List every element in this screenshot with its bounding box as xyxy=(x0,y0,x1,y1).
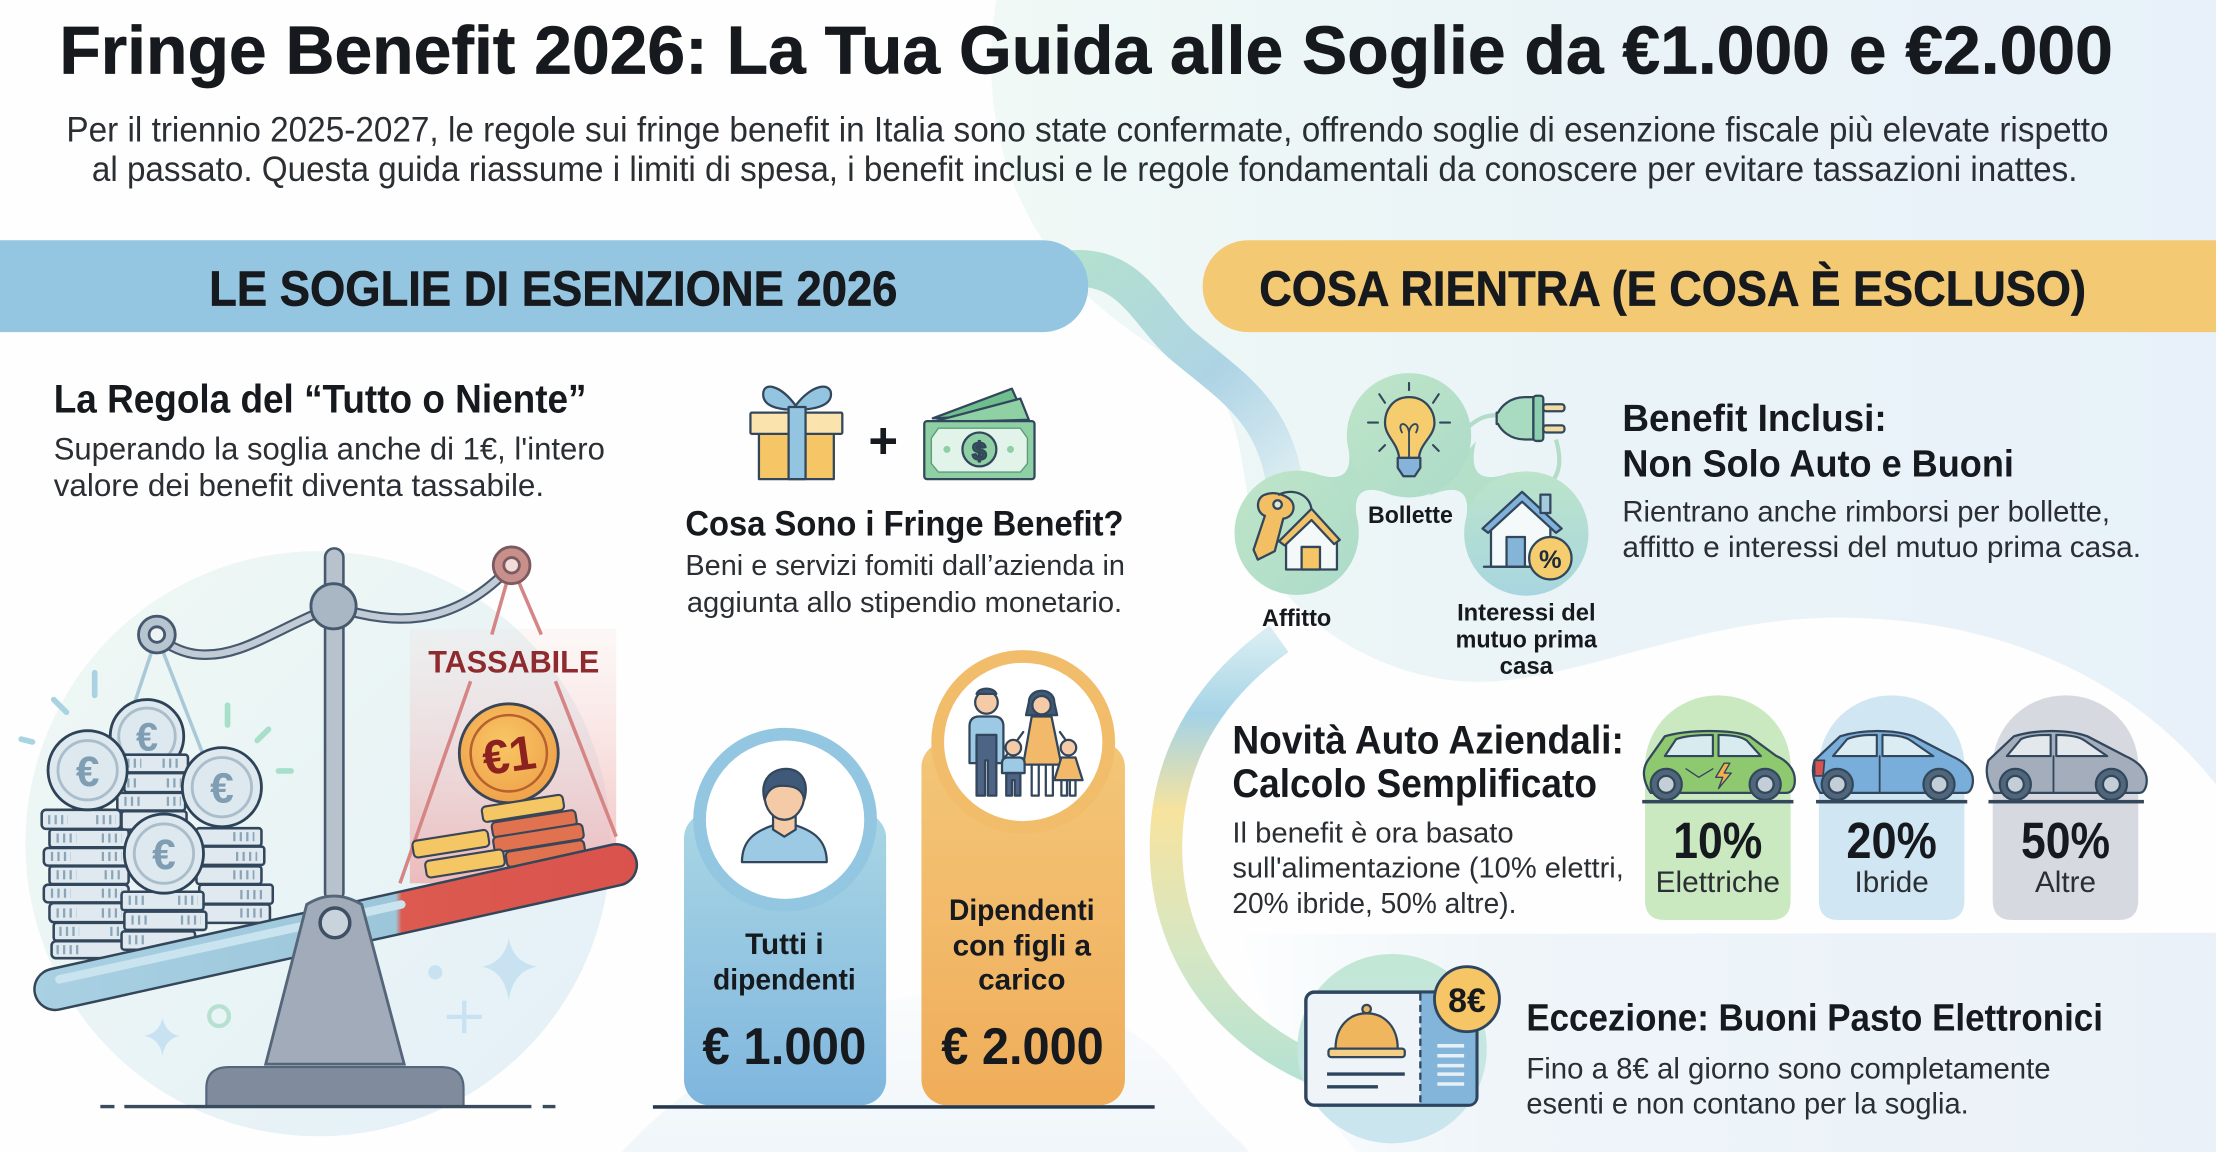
text block: auto aziendali: Il benefit è ora basato xyxy=(1232,816,1514,848)
text block: tutto o niente xyxy=(54,378,605,503)
card: tutti i dipendenti xyxy=(684,734,886,1105)
silver coin left xyxy=(48,731,127,810)
decorative sparkles xyxy=(144,938,537,1056)
text block: auto aziendali: sull'alimentazione (10% elettri, xyxy=(1232,852,1624,884)
background: pale blue lower right area xyxy=(1244,933,2216,1152)
silver coin left: € xyxy=(76,748,99,795)
text block: cosa sono: Cosa Sono i Fringe Benefit? xyxy=(685,505,1124,544)
icon: house with percent: % xyxy=(1539,546,1562,574)
intro paragraph xyxy=(66,110,2109,189)
plus sign: + xyxy=(868,412,898,469)
circle: interessi xyxy=(1464,471,1589,596)
coin stack upper xyxy=(117,755,188,830)
right hanging strings xyxy=(400,565,616,883)
green necks joining the circles xyxy=(1312,442,1511,527)
text block: cosa sono xyxy=(685,505,1125,619)
text block: auto aziendali: Novità Auto Aziendali: xyxy=(1232,718,1624,762)
baseline under cards xyxy=(653,1105,1155,1109)
text lines xyxy=(1327,1074,1405,1087)
header: right section xyxy=(1203,240,2216,332)
card: elettriche: 10% xyxy=(1673,812,1762,869)
circle: affitto xyxy=(1234,471,1359,595)
gold coin one euro: €1 xyxy=(479,726,539,786)
coin stack left xyxy=(42,810,129,958)
title: Fringe Benefit 2026: La Tua Guida alle Soglie da €1.000 e €2.000 xyxy=(59,13,2113,88)
silver coin right: € xyxy=(210,765,234,812)
cluster: included benefits: mutuo prima xyxy=(1456,626,1598,653)
card: ibride: Ibride xyxy=(1855,866,1929,899)
pivot knob xyxy=(311,584,356,629)
silver coin right xyxy=(182,748,261,827)
right ring xyxy=(493,547,530,584)
background: pale hill behind threshold cards xyxy=(622,989,1249,1152)
cluster: included benefits: Interessi del xyxy=(1457,599,1596,626)
stand xyxy=(266,896,404,1064)
ground line xyxy=(1988,800,2144,803)
text block: auto aziendali xyxy=(1232,718,1624,919)
stub lines xyxy=(1437,1046,1464,1084)
connector: curved ring on the right column xyxy=(1166,639,1314,1068)
icon: banknotes: $ xyxy=(972,437,986,465)
text block: benefit inclusi: affitto e interessi del mutuo prima casa. xyxy=(1622,531,2141,564)
card: altre: 50% xyxy=(2021,812,2110,869)
tassabile red glow xyxy=(410,629,616,883)
card: elettriche xyxy=(1642,695,1795,920)
icon: person xyxy=(742,769,827,862)
text block: buoni pasto xyxy=(1526,996,2103,1121)
text block: benefit inclusi: Non Solo Auto e Buoni xyxy=(1622,442,2014,485)
card: ibride: 20% xyxy=(1846,812,1937,869)
ground line xyxy=(100,1105,555,1108)
tassabile label: TASSABILE xyxy=(428,645,599,680)
voucher background circle xyxy=(1297,954,1487,1143)
card: elettriche: Elettriche xyxy=(1656,866,1780,899)
cluster: included benefits xyxy=(1234,373,1598,680)
cloche xyxy=(1328,1005,1405,1057)
text block: tutto o niente: valore dei benefit diventa tassabile. xyxy=(54,468,544,503)
small gold and red coin stack xyxy=(412,794,586,878)
icon: house with percent xyxy=(1483,492,1572,579)
silver coin front: € xyxy=(152,831,176,878)
coin stack centre xyxy=(122,892,206,950)
icon: gift xyxy=(750,387,842,479)
text block: cosa sono: aggiunta allo stipendio monetario. xyxy=(687,587,1122,619)
icon: green electric car xyxy=(1644,731,1795,800)
icon: electric plug xyxy=(1497,396,1564,441)
left hanging strings xyxy=(134,636,202,752)
wire from bulb to house xyxy=(1466,415,1559,483)
card: tutti i dipendenti: Tutti i xyxy=(745,928,824,961)
icon: keys and house xyxy=(1254,492,1340,570)
card: tutti i dipendenti: dipendenti xyxy=(713,963,856,996)
card: altre: Altre xyxy=(2035,866,2096,899)
text block: buoni pasto: Eccezione: Buoni Pasto Elettronici xyxy=(1526,996,2103,1039)
text block: tutto o niente: Superando la soglia anche di 1€, l'intero xyxy=(54,431,605,466)
cluster: included benefits: Bollette xyxy=(1368,502,1453,529)
text block: buoni pasto: esenti e non contano per la soglia. xyxy=(1526,1088,1969,1121)
header: left section xyxy=(0,240,1088,332)
intro paragraph: al passato. Questa guida riassume i limiti di spesa, i benefit inclusi e le regole fondamentali da conoscere per evitare tassazioni inattes. xyxy=(92,150,2078,189)
card: dipendenti con figli: € 2.000 xyxy=(941,1018,1104,1076)
icon: banknotes xyxy=(924,389,1035,479)
card: tutti i dipendenti: € 1.000 xyxy=(702,1018,866,1076)
illustration: balance scale xyxy=(21,547,616,1136)
ticket xyxy=(1306,992,1477,1105)
stand base xyxy=(206,1067,464,1107)
silver coin behind: € xyxy=(136,715,158,759)
pole xyxy=(325,548,343,902)
icon: light bulb xyxy=(1368,383,1450,476)
card: altre xyxy=(1987,695,2147,920)
circle: bollette xyxy=(1347,373,1471,497)
text block: benefit inclusi: Benefit Inclusi: xyxy=(1622,397,1887,440)
text block: buoni pasto: Fino a 8€ al giorno sono completamente xyxy=(1526,1052,2051,1085)
silver coin behind xyxy=(110,700,184,773)
ground line xyxy=(1642,800,1793,803)
left ring xyxy=(138,616,175,653)
card: dipendenti con figli xyxy=(921,656,1125,1105)
text block: tutto o niente: La Regola del “Tutto o Niente” xyxy=(54,378,587,422)
card: dipendenti con figli: carico xyxy=(978,963,1065,996)
card circle xyxy=(938,656,1109,827)
cluster: included benefits: casa xyxy=(1500,653,1554,680)
icon: grey combustion car xyxy=(1987,731,2147,800)
card: dipendenti con figli: con figli a xyxy=(953,929,1091,962)
cluster: included benefits: Affitto xyxy=(1262,605,1331,632)
ground line xyxy=(1816,800,1967,803)
text block: auto aziendali: Calcolo Semplificato xyxy=(1232,762,1597,806)
beam arms xyxy=(155,565,512,655)
scale background circle xyxy=(25,551,611,1136)
icon: family xyxy=(970,689,1083,796)
tilted plank xyxy=(55,865,616,989)
background: pale blue upper right area xyxy=(991,0,2216,784)
text block: benefit inclusi: Rientrano anche rimborsi per bollette, xyxy=(1622,495,2110,528)
icon: meal voucher: 8€ xyxy=(1448,982,1486,1020)
icon: meal voucher xyxy=(1297,954,1499,1143)
card circle xyxy=(700,734,871,905)
header: left section: LE SOGLIE DI ESENZIONE 2026 xyxy=(209,261,897,316)
badge 8 euro xyxy=(1434,967,1499,1032)
coin glints xyxy=(21,673,291,771)
text block: cosa sono: Beni e servizi fomiti dall’azienda in xyxy=(685,550,1125,582)
card: ibride xyxy=(1813,695,1973,920)
connector: curved band between headers and benefits xyxy=(1074,268,1286,495)
ticket stub xyxy=(1420,994,1475,1104)
text block: auto aziendali: 20% ibride, 50% altre). xyxy=(1232,887,1516,919)
gold coin one euro xyxy=(459,704,558,803)
header: right section: COSA RIENTRA (E COSA È ESCLUSO) xyxy=(1259,260,2086,316)
text block: benefit inclusi xyxy=(1622,397,2141,564)
coin stack right xyxy=(196,828,273,923)
intro paragraph: Per il triennio 2025-2027, le regole sui fringe benefit in Italia sono state confermate, offrendo soglie di esenzione fiscale più elevate rispetto xyxy=(66,110,2109,149)
silver coin front xyxy=(124,814,204,893)
stand pivot xyxy=(320,908,350,938)
card: dipendenti con figli: Dipendenti xyxy=(949,894,1095,927)
icon: blue hybrid car xyxy=(1813,731,1973,800)
